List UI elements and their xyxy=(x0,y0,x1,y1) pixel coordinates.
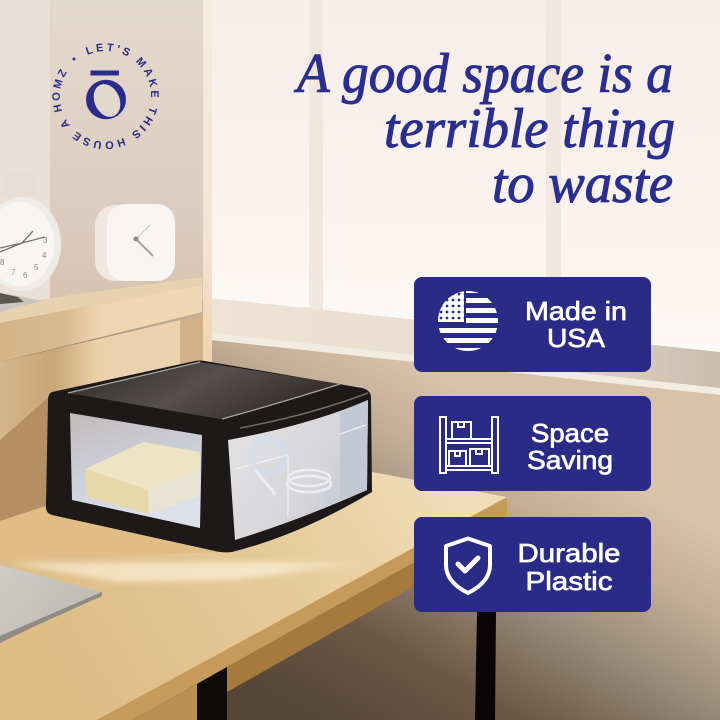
left drawer window xyxy=(70,413,202,528)
lid top xyxy=(68,362,340,419)
small items on shelf xyxy=(0,293,43,312)
label: Made in xyxy=(525,296,627,326)
icon: shelf with boxes xyxy=(440,417,498,473)
sponge block xyxy=(85,442,200,514)
clock: round alarm clock: 5 xyxy=(34,263,39,272)
icon: shield with check xyxy=(446,538,490,593)
clock: round alarm clock: 4 xyxy=(42,251,47,260)
circular slogan: LET'S MAKE THIS HOUSE A HOMZ xyxy=(52,43,159,150)
label: Durable xyxy=(518,538,620,568)
headline: A good space is a xyxy=(293,43,673,105)
drawer dividers xyxy=(235,425,366,518)
storage drawer unit xyxy=(46,360,372,552)
logo badge xyxy=(52,43,159,150)
slogan dot xyxy=(72,58,76,60)
label: USA xyxy=(547,323,606,353)
wooden shelf xyxy=(0,277,203,521)
headline xyxy=(293,43,675,215)
badge: Durable Plastic xyxy=(414,517,651,612)
clock: round alarm clock xyxy=(0,174,61,291)
headline: to waste xyxy=(492,153,673,215)
drawer body xyxy=(46,360,372,552)
badge: Space Saving xyxy=(414,396,651,491)
clock: round alarm clock: 8 xyxy=(0,258,5,267)
clock: round alarm clock: 6 xyxy=(23,271,28,280)
badge: Made in USA xyxy=(414,277,651,372)
apron xyxy=(227,563,413,692)
cable coil xyxy=(251,439,331,494)
clock: square wall clock xyxy=(95,204,175,281)
right drawer front xyxy=(228,400,368,540)
headline: terrible thing xyxy=(384,98,675,160)
logo ring xyxy=(86,80,126,121)
logo bar xyxy=(90,70,119,76)
clock: round alarm clock: 7 xyxy=(11,268,16,277)
clock: round alarm clock: 3 xyxy=(43,236,48,245)
desk edge xyxy=(97,497,507,720)
front rim highlight xyxy=(240,393,368,428)
label: Plastic xyxy=(526,566,612,596)
left wall xyxy=(0,0,204,300)
desk legs xyxy=(197,612,496,720)
label: Saving xyxy=(527,445,613,475)
desk xyxy=(0,472,507,720)
laptop xyxy=(0,565,102,643)
label: Space xyxy=(531,418,609,448)
wall post xyxy=(203,0,212,362)
icon: US flag xyxy=(438,291,498,351)
